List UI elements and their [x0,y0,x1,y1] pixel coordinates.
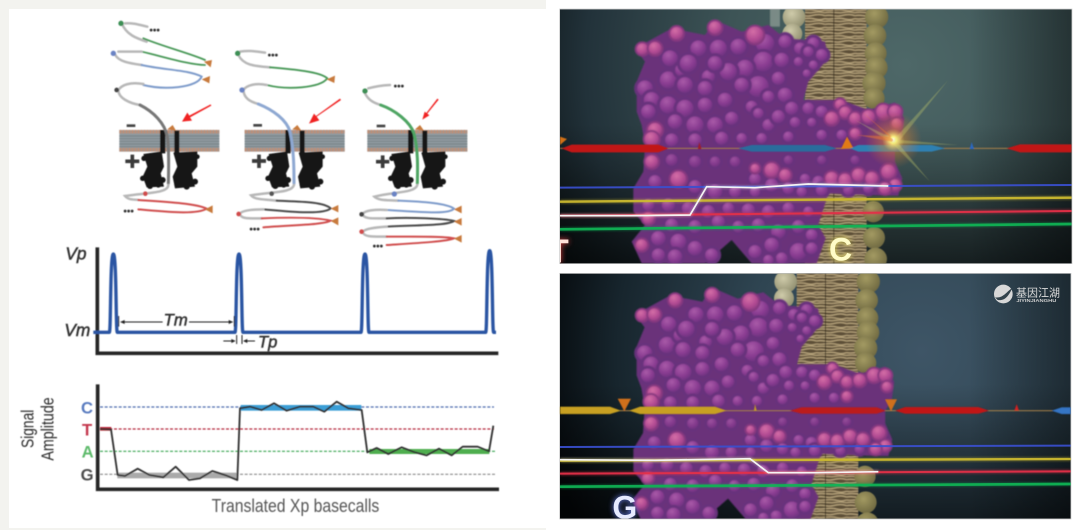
logo: JIYINJIANGHU: JIYINJIANGHU [1016,298,1056,303]
lipid membrane [774,270,880,530]
y axis title [17,397,57,461]
base letter C: C [81,399,93,418]
pulse trace [93,251,496,332]
DNA ribbon with bases [560,399,1071,414]
Tp dimension [223,332,277,351]
schematic 1: G-T-C strand through pore: ••• [149,25,160,36]
chart: voltage pulse waveform [64,243,498,353]
signal axes [98,384,499,489]
schematic 3: A-C-G-T strand through pore [359,81,467,252]
signal trace [100,402,493,480]
DNA ribbon with bases [560,137,1072,152]
plus sign [252,155,266,168]
y axis title: Amplitude [37,397,57,461]
minus sign [253,124,262,127]
label Vm: Vm [64,320,90,340]
schematic 3: A-C-G-T strand through pore: ••• [394,81,405,92]
signal level lines [560,446,1071,487]
pulse axes [97,247,498,353]
schematic 2: C-G-T strand through pore: ••• [268,50,279,61]
red arrow 1 [182,104,211,122]
Tp dimension: Tp [258,332,277,351]
Tm dimension: Tm [164,310,188,329]
label Vp: Vp [65,243,87,263]
glowing letter T: T [548,233,569,270]
level line glow [560,198,1072,229]
signal level lines [560,185,1072,229]
Tm dimension [119,310,234,329]
red arrow 2 [309,99,341,124]
base letter G: G [81,465,94,484]
panel: protein nanopore render, base C [548,5,1072,272]
glowing letter C: C [829,231,852,267]
schematic 3: A-C-G-T strand through pore: ••• [373,241,384,252]
schematic 1: G-T-C strand through pore [111,21,219,218]
schematic 1: G-T-C strand through pore: ••• [123,207,134,218]
minus sign [127,124,135,127]
glowing letter C: C [829,231,852,267]
minus sign [377,125,385,127]
purple protein [632,20,904,267]
base letter A: A [82,442,94,461]
base letter T: T [82,421,92,440]
page frame: left panel strip [0,0,546,530]
schematic 2: C-G-T strand through pore: ••• [249,225,260,236]
plus sign [125,155,139,168]
glowing letter G: G [612,490,637,526]
purple protein [632,287,894,524]
logo: JIYINJIANGHU: 基因江湖 [1016,287,1060,300]
white current trace [560,184,888,216]
translucent white hint behind protein [770,7,780,27]
logo: JIYINJIANGHU [994,285,1060,303]
red arrow 3 [422,99,439,120]
white current trace [560,459,878,473]
glowing letter T: T [548,233,569,270]
level line glow [560,459,1071,487]
schematic 2: C-G-T strand through pore [235,50,345,236]
level fills [100,405,489,478]
lens flare [858,84,954,180]
x axis title: Translated Xp basecalls [212,495,379,516]
panel: nanopore translocation schematics [111,21,467,252]
lipid membrane [782,5,888,272]
base level lines [100,407,496,474]
y axis title: Signal [17,410,37,448]
glowing letter G: G [612,490,637,526]
chart: signal amplitude basecalls [17,384,499,516]
plus sign [376,155,389,168]
panel: protein nanopore render, base G [559,270,1071,530]
